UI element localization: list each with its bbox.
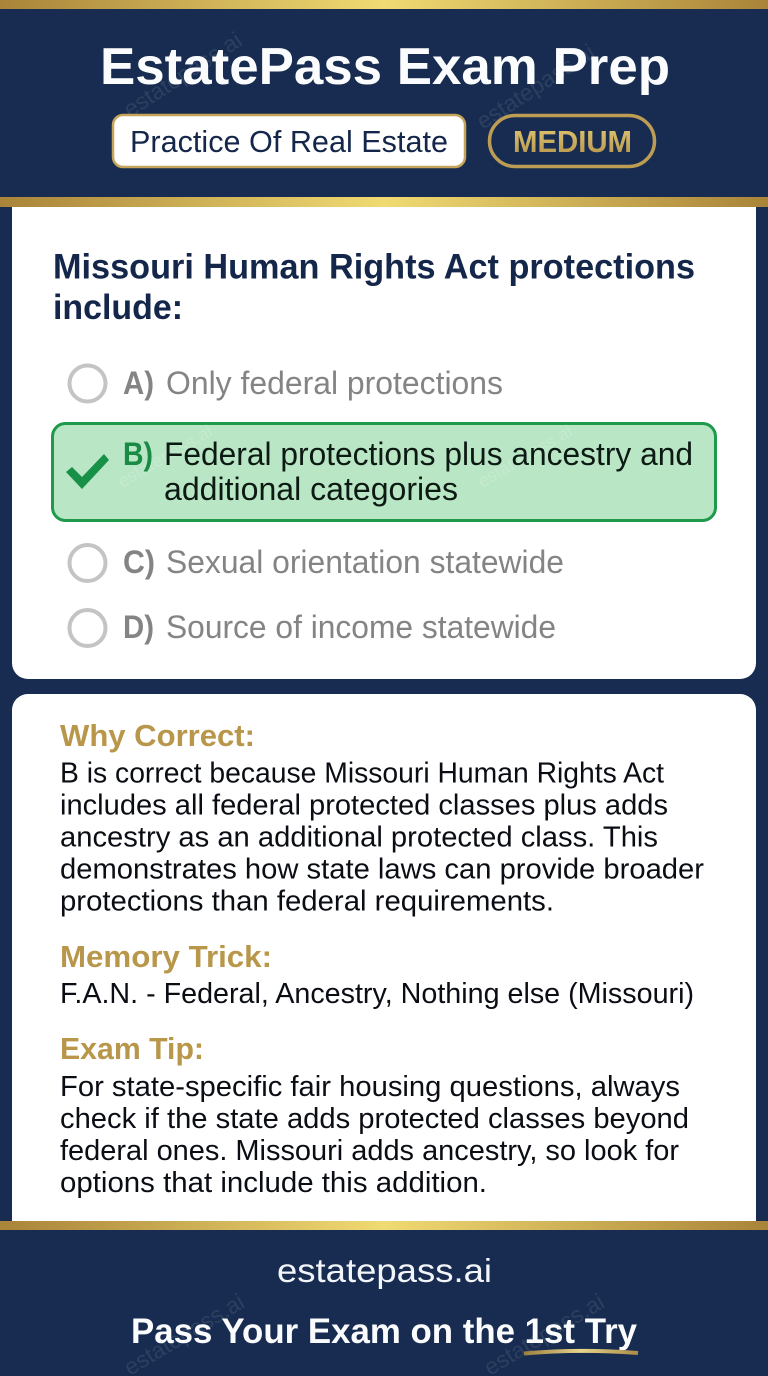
icon: check mark <box>66 454 109 489</box>
panel: question <box>12 207 756 679</box>
text: exam tip body: For state-specific fair housing questions, always <box>60 1071 680 1103</box>
heading: exam tip: Exam Tip: <box>60 1031 204 1066</box>
panel: explanation <box>12 694 756 1221</box>
header band <box>0 0 768 197</box>
option B: correct answer <box>52 421 716 520</box>
option B: correct answer: Federal protections plus ancestry and <box>164 436 693 472</box>
watermark: header right: estatepass.ai <box>472 39 599 134</box>
question text: include: <box>53 288 183 327</box>
option A: Only federal protections <box>166 365 503 401</box>
text: why correct body: ancestry as an additional protected class. This <box>60 822 658 854</box>
option D: D) <box>123 609 154 645</box>
text: memory trick body: F.A.N. - Federal, Ancestry, Nothing else (Missouri) <box>60 978 694 1010</box>
tagline: Pass Your Exam on the 1st Try <box>131 1312 638 1351</box>
option B: correct answer: B) <box>123 436 153 472</box>
option C: C) <box>123 544 155 580</box>
top gold bar <box>0 0 768 9</box>
text: exam tip body: check if the state adds protected classes beyond <box>60 1103 689 1135</box>
option A: A) <box>123 365 154 401</box>
text: why correct body: protections than federal requirements. <box>60 886 554 918</box>
option C: Sexual orientation statewide <box>166 544 564 580</box>
watermark: header left: estatepass.ai <box>119 27 246 122</box>
text: why correct body: B is correct because Missouri Human Rights Act <box>60 758 664 790</box>
option B: correct answer: additional categories <box>164 471 458 507</box>
footer band <box>0 1230 768 1376</box>
watermark: answer right: estatepass.ai <box>474 421 576 491</box>
footer gold divider <box>0 1221 768 1230</box>
website: estatepass.ai <box>277 1252 492 1289</box>
header gold divider <box>0 197 768 207</box>
title: EstatePass Exam Prep <box>100 38 670 96</box>
difficulty pill <box>490 116 654 166</box>
text: exam tip body: federal ones. Missouri adds ancestry, so look for <box>60 1135 679 1167</box>
category pill: Practice Of Real Estate <box>130 124 448 159</box>
heading: why correct: Why Correct: <box>60 718 255 753</box>
category pill <box>113 115 465 167</box>
question text: Missouri Human Rights Act protections <box>53 248 695 286</box>
difficulty pill: MEDIUM <box>513 124 632 159</box>
text: exam tip body: options that include this addition. <box>60 1167 487 1199</box>
watermark: answer left: estatepass.ai <box>114 421 216 491</box>
option D: Source of income statewide <box>166 609 556 645</box>
text: why correct body: includes all federal protected classes plus adds <box>60 790 668 822</box>
tagline underline <box>524 1351 638 1354</box>
heading: memory trick: Memory Trick: <box>60 939 272 974</box>
text: why correct body: demonstrates how state laws can provide broader <box>60 854 704 886</box>
